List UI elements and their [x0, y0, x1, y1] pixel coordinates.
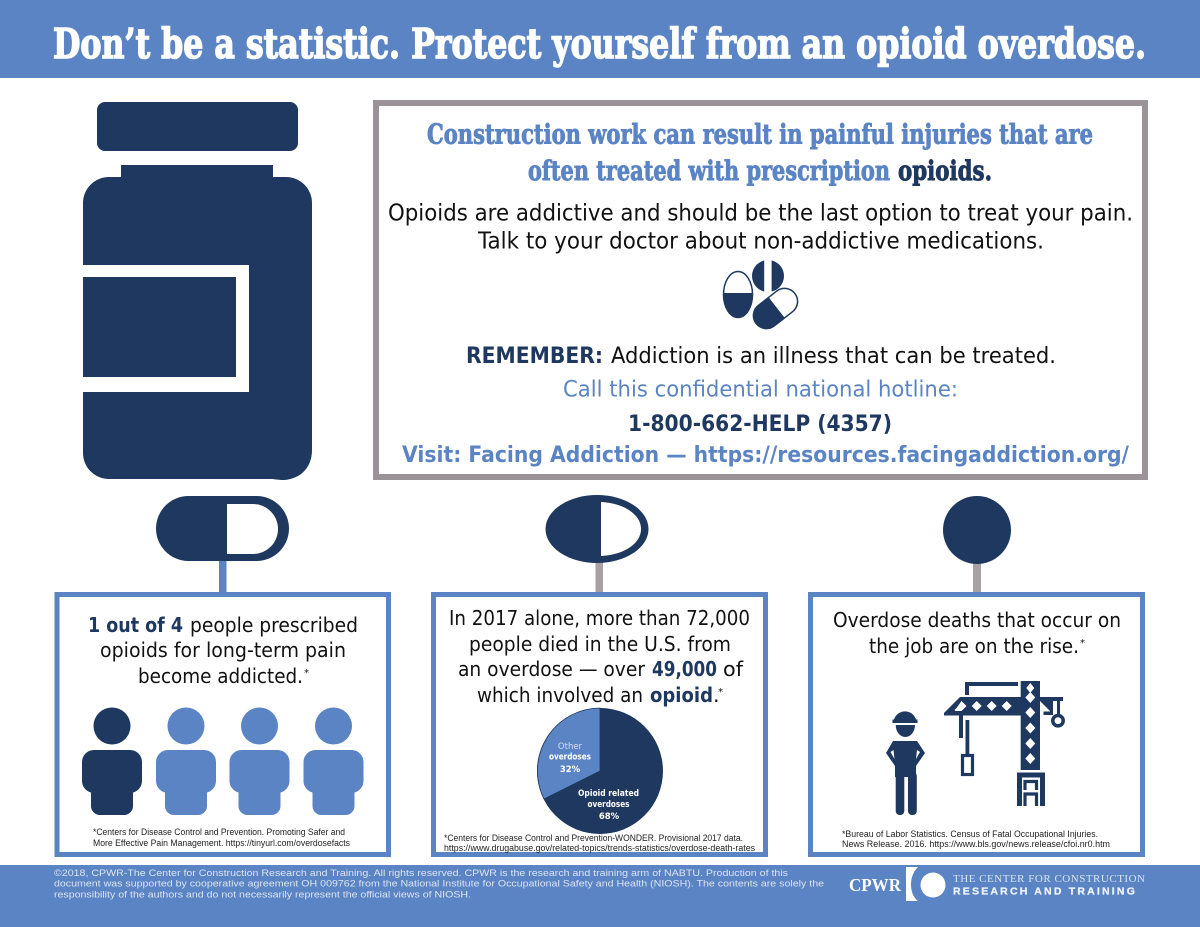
- footnote: [93, 827, 350, 848]
- copyright text: document was supported by cooperative agreement OH 009762 from the National Institute for Occupational Safety and Health (NIOSH). The contents are solely the: [54, 878, 824, 890]
- statistic text: .: [713, 683, 720, 707]
- pie chart: Other: [558, 742, 583, 752]
- body text: [388, 200, 1133, 254]
- people icons: [82, 708, 364, 815]
- statistic text: people prescribed: [190, 613, 358, 637]
- statistic text: 1 out of 4: [88, 613, 183, 637]
- footnote: [842, 829, 1110, 849]
- pie chart: overdoses: [588, 800, 630, 810]
- statistic text: *: [718, 687, 723, 698]
- pie chart: 68%: [599, 812, 620, 822]
- pie chart: Opioid related: [578, 789, 639, 799]
- pie chart: 32%: [560, 765, 581, 775]
- remember text: Call this confidential national hotline:: [563, 376, 958, 402]
- copyright text: [54, 868, 824, 900]
- footnote: News Release. 2016. https://www.bls.gov/news.release/cfoi.nr0.htm: [842, 839, 1110, 849]
- body text: Talk to your doctor about non-addictive medications.: [477, 228, 1044, 254]
- statistic text: become addicted.: [138, 664, 303, 688]
- icon: capsule: [156, 496, 289, 593]
- logo: CPWR: [849, 867, 1145, 901]
- footnote: *Centers for Disease Control and Prevention-WONDER. Provisional 2017 data.: [444, 833, 743, 843]
- statistic text: of: [723, 657, 744, 681]
- logo: CPWR: RESEARCH AND TRAINING: [953, 886, 1137, 898]
- remember text: 1-800-662-HELP (4357): [628, 411, 892, 437]
- statistic text: [833, 608, 1121, 658]
- statistic text: the job are on the rise.: [869, 634, 1079, 658]
- remember text: REMEMBER:: [466, 343, 603, 369]
- statistic text: opioid: [650, 683, 713, 707]
- panel: 2017 overdose deaths: [434, 594, 766, 854]
- heading: [427, 118, 1093, 187]
- statistic text: [88, 613, 358, 688]
- statistic text: an overdose — over: [458, 657, 646, 681]
- logo: CPWR: THE CENTER FOR CONSTRUCTION: [953, 873, 1145, 885]
- body text: Opioids are addictive and should be the last option to treat your pain.: [388, 200, 1133, 226]
- statistic text: which involved an: [477, 683, 643, 707]
- pie chart: overdoses: [549, 752, 591, 762]
- panel: 1 out of 4: [57, 594, 388, 854]
- statistic text: [449, 606, 750, 707]
- copyright text: responsibility of the authors and do not necessarily represent the official views of NIOSH.: [54, 890, 471, 900]
- logo: CPWR: CPWR: [849, 875, 901, 895]
- statistic text: Overdose deaths that occur on: [833, 608, 1121, 632]
- panel: construction injuries message: [376, 103, 1145, 477]
- footnote: [444, 833, 755, 853]
- footnote: *Centers for Disease Control and Prevention. Promoting Safer and: [93, 827, 345, 837]
- statistic text: In 2017 alone, more than 72,000: [449, 606, 750, 630]
- panel: deaths on the job: [810, 594, 1142, 854]
- pie chart: [537, 708, 663, 834]
- statistic text: *: [304, 668, 309, 679]
- statistic text: 49,000: [652, 657, 717, 681]
- header banner: [0, 0, 1200, 78]
- footnote: https://www.drugabuse.gov/related-topics/trends-statistics/overdose-death-rates: [444, 843, 755, 853]
- footer band: [0, 865, 1200, 927]
- icon: tower crane: [944, 681, 1063, 806]
- icon: oval tablet: [546, 495, 648, 593]
- remember text: [402, 343, 1130, 468]
- icon: pill bottle: [83, 102, 312, 480]
- icon: round tablet: [943, 496, 1011, 593]
- copyright text: ©2018, CPWR-The Center for Construction Research and Training. All rights reserved. CPWR is the research and training arm of NABTU. Production of this: [54, 868, 788, 879]
- footnote: More Effective Pain Management. https://tinyurl.com/overdosefacts: [93, 838, 350, 848]
- statistic text: opioids for long-term pain: [100, 638, 346, 662]
- remember text: Addiction is an illness that can be treated.: [611, 343, 1056, 369]
- statistic text: people died in the U.S. from: [469, 632, 731, 656]
- icon: pills: [724, 258, 803, 334]
- icon: construction worker: [886, 711, 925, 815]
- footnote: *Bureau of Labor Statistics. Census of Fatal Occupational Injuries.: [842, 829, 1098, 839]
- heading: often treated with prescription: [528, 155, 890, 187]
- statistic text: *: [1080, 638, 1085, 649]
- remember text: Visit: Facing Addiction — https://resources.facingaddiction.org/: [402, 442, 1130, 468]
- heading: opioids.: [898, 155, 992, 187]
